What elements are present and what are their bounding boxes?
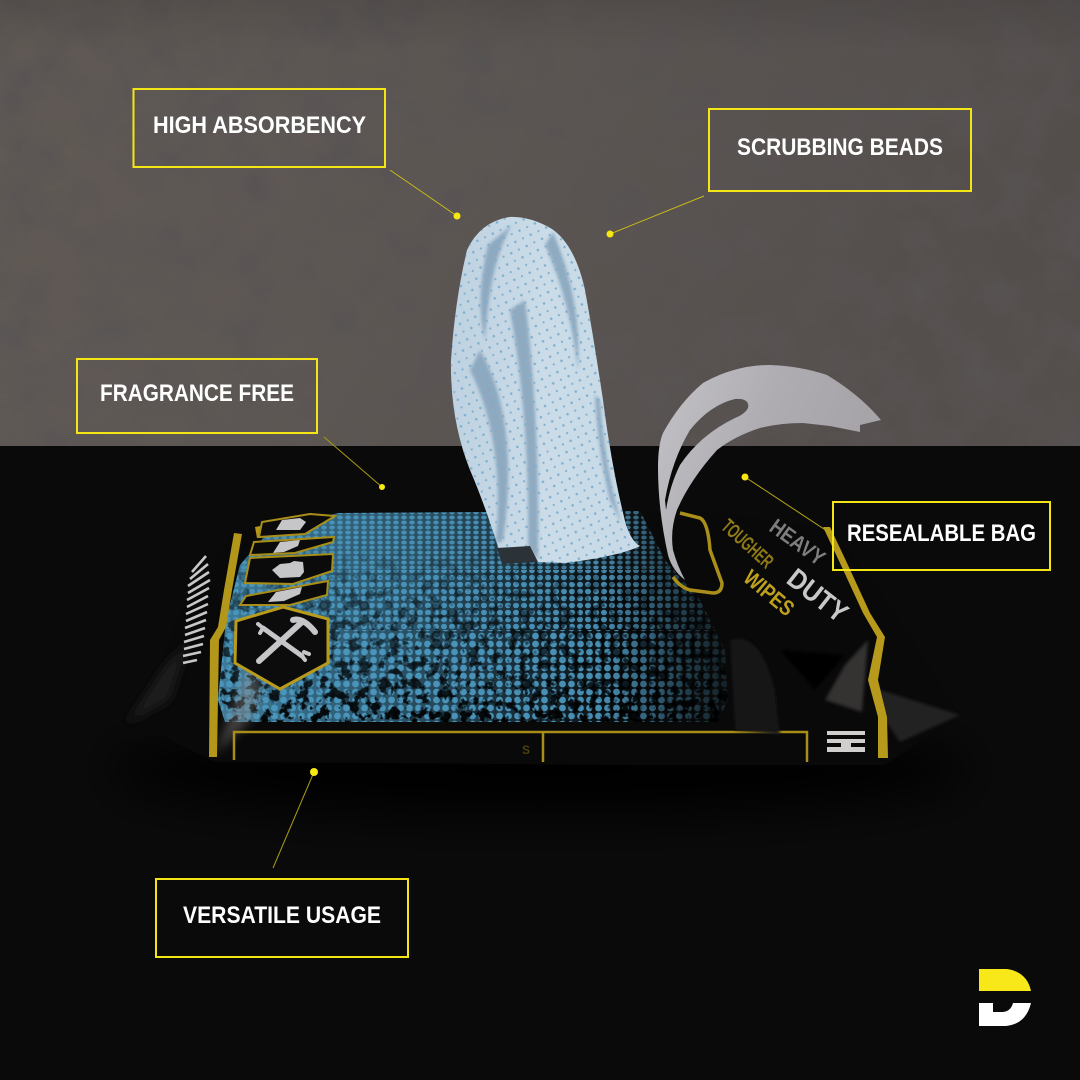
label text: RESEALABLE BAG (847, 520, 1036, 547)
gold stripe left (209, 533, 242, 757)
label box (77, 359, 317, 433)
icon band: boot (250, 537, 334, 555)
label text: HIGH ABSORBENCY (153, 112, 366, 139)
product name on bag: TOUGHER (717, 515, 778, 573)
pointer line and dot (390, 170, 460, 220)
pointer line and dot (324, 437, 385, 490)
gold stripe top left (255, 526, 261, 538)
label box (709, 109, 971, 191)
label box (134, 89, 385, 167)
pointer line and dot (742, 474, 830, 533)
product name on bag: HEAVY (765, 514, 830, 571)
product name on bag: WIPES (739, 565, 799, 621)
wipe dot texture (451, 217, 640, 563)
product name on bag (717, 514, 854, 629)
logo top half (979, 969, 1031, 991)
callout: scrubbing beads (606, 109, 971, 238)
wipe fold shadows (470, 225, 622, 560)
product: wipes bag (134, 511, 958, 797)
bottom gold panel outline (234, 732, 807, 762)
wipe cloth (451, 217, 640, 563)
zebra barcode on bag edge (183, 556, 210, 663)
left wing gloss (125, 640, 190, 725)
background: concrete wall (0, 0, 1080, 447)
band glyphs (268, 518, 306, 602)
pointer line and dot (273, 768, 318, 868)
resealable flap (658, 365, 881, 580)
logo bottom half (979, 1003, 1031, 1026)
label text: SCRUBBING BEADS (737, 134, 943, 161)
wipe base shadow (497, 546, 538, 564)
background: black table (0, 446, 1080, 1080)
icon band: tool (240, 581, 328, 605)
gold stripe right (823, 527, 888, 758)
bag shadow and reflection (110, 725, 970, 815)
callout: high absorbency (134, 89, 460, 220)
label box (833, 502, 1050, 570)
bag body (105, 510, 960, 765)
blue halftone print (218, 511, 728, 722)
icon band: shirt (245, 554, 333, 584)
left fold shine (215, 665, 262, 755)
H logo on bag (827, 731, 865, 752)
pointer line and dot (606, 196, 704, 238)
pulled wipe (451, 217, 640, 564)
label box (156, 879, 408, 957)
gold opening outline (673, 513, 722, 593)
right dark wrinkles (730, 639, 960, 742)
hexagon tools icon (235, 607, 328, 689)
label text: VERSATILE USAGE (183, 902, 381, 929)
callout: versatile usage (156, 768, 408, 957)
label text: FRAGRANCE FREE (100, 380, 294, 407)
bottom panel faint glyph: S (522, 743, 530, 757)
callout: resealable bag (742, 474, 1050, 570)
logo: D mark (979, 969, 1031, 1026)
callout: fragrance free (77, 359, 385, 490)
top icon band (259, 514, 335, 537)
product name on bag: DUTY (781, 562, 854, 629)
